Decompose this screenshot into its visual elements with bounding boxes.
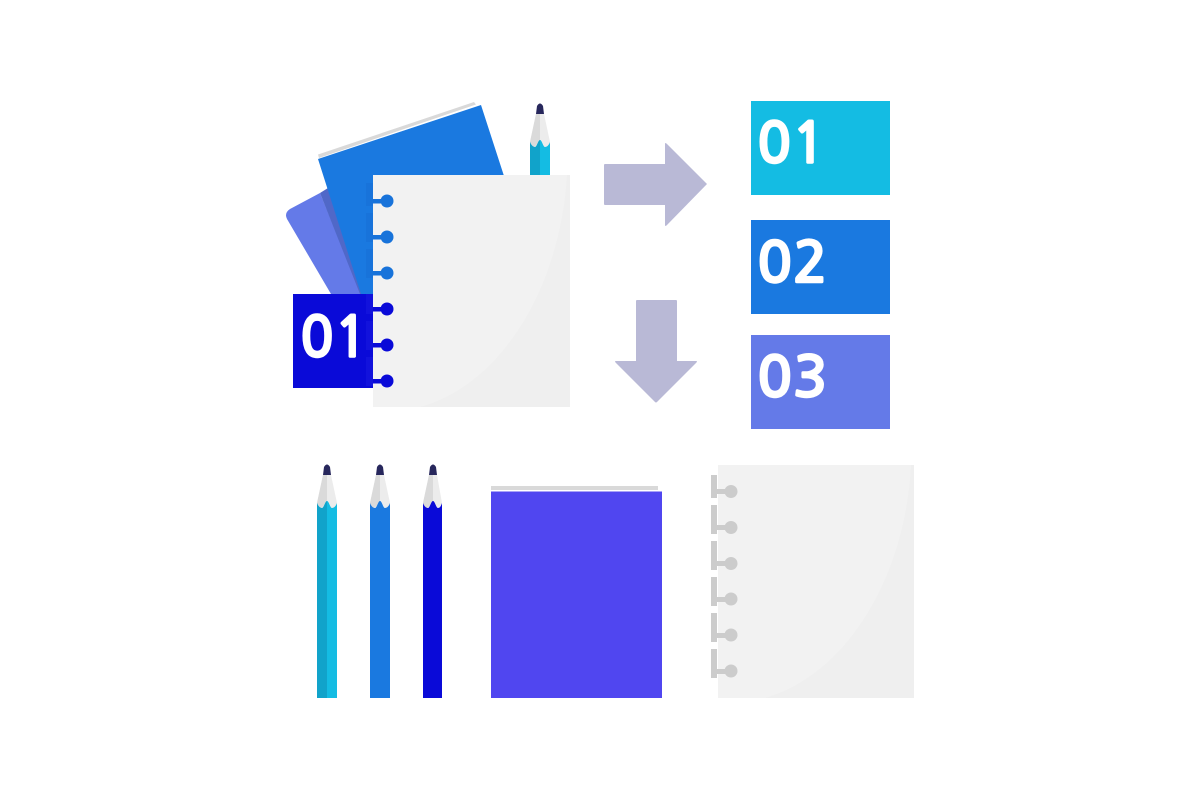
- card 02: 02: [757, 236, 828, 292]
- arrow: down: [615, 300, 697, 402]
- light blue back book: [286, 188, 362, 294]
- card 03: 03: [757, 351, 828, 406]
- page: [718, 465, 914, 698]
- pencil: dark blue: [423, 464, 442, 698]
- card 02: [751, 220, 890, 314]
- card 01: [751, 101, 890, 195]
- rings: [711, 485, 738, 678]
- closed purple book: [491, 486, 662, 698]
- card 03: [751, 335, 890, 429]
- ring slots: [711, 475, 717, 678]
- pencil behind the notebook: [530, 104, 550, 175]
- pencil: cyan: [317, 464, 337, 698]
- arrow: right: [604, 143, 707, 226]
- notebook page: [373, 175, 570, 407]
- pencil: blue: [370, 464, 390, 698]
- card 01: 01: [757, 117, 826, 172]
- ring bars: [366, 183, 373, 386]
- notebook rings: [373, 194, 394, 388]
- loose notebook page: [711, 465, 914, 698]
- tilted blue book: [318, 102, 504, 294]
- square label 01: 01: [300, 311, 368, 366]
- square label 01: [293, 294, 373, 388]
- illustration: notebook stack with label 01: [286, 102, 570, 407]
